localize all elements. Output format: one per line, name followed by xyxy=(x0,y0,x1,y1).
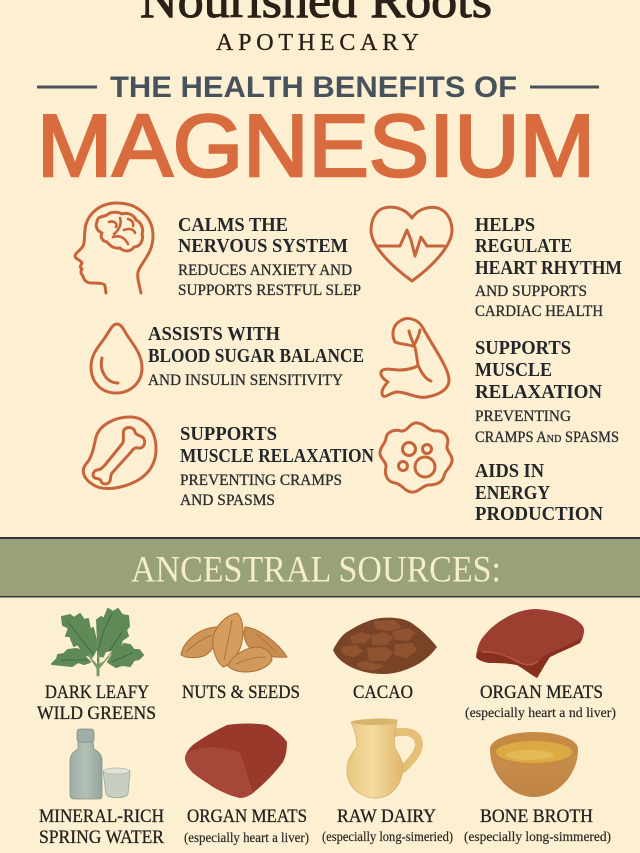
text: helps regulate heart rhythm: AND SUPPORTS xyxy=(475,283,587,300)
icon: bottle and cup xyxy=(70,729,130,799)
brand subtitle: APOTHECARY xyxy=(216,30,419,56)
text: calms the nervous system: SUPPORTS RESTFUL SLEP xyxy=(178,282,361,299)
label: dark leafy wild greens: DARK LEAFY xyxy=(45,682,149,703)
text: supports muscle relaxation right: MUSCLE xyxy=(475,359,552,381)
label: raw dairy: (especially long-simeried) xyxy=(322,830,453,845)
title xyxy=(37,71,599,195)
icon: cell with mitochondria xyxy=(380,423,452,492)
label: bone broth: BONE BROTH xyxy=(480,806,593,827)
benefit: muscle relaxation left xyxy=(83,417,374,509)
section banner: ancestral sources xyxy=(0,537,640,598)
text: aids in energy production xyxy=(475,460,604,525)
icon: blood drop xyxy=(91,324,142,393)
label: raw dairy xyxy=(322,806,453,845)
icon: bowl of broth xyxy=(490,732,578,797)
text: helps regulate heart rhythm xyxy=(475,214,622,320)
source: organ meats bottom xyxy=(184,724,309,846)
source: dark leafy wild greens xyxy=(37,609,156,724)
text: aids in energy production: AIDS IN xyxy=(475,460,545,482)
header: brand xyxy=(140,0,492,56)
icon: cacao pod xyxy=(333,618,437,674)
icon: bone in outline xyxy=(83,417,156,489)
label: cacao: CACAO xyxy=(353,682,413,703)
text: calms the nervous system: REDUCES ANXIETY AND xyxy=(178,262,352,279)
label: organ meats top xyxy=(465,682,616,721)
label: raw dairy: RAW DAIRY xyxy=(337,806,436,827)
source: bone broth xyxy=(464,732,611,845)
benefit: energy production xyxy=(380,423,604,525)
text: supports muscle relaxation: MUSCLE RELAXATION xyxy=(180,445,374,467)
text: supports muscle relaxation xyxy=(180,423,374,509)
benefit: muscle relaxation right xyxy=(381,319,619,446)
label: organ meats top: (especially heart a nd liver) xyxy=(465,706,616,721)
text: supports muscle relaxation: PREVENTING CRAMPS xyxy=(180,472,342,489)
text: assists with blood sugar balance xyxy=(148,323,364,389)
text: calms the nervous system: CALMS THE xyxy=(178,214,288,236)
icon: parsley leaf xyxy=(52,609,143,675)
benefit: heart rhythm xyxy=(371,207,622,320)
source: cacao xyxy=(333,618,437,703)
label: organ meats top: ORGAN MEATS xyxy=(480,682,603,703)
text: aids in energy production: PRODUCTION xyxy=(475,503,604,525)
title rule left xyxy=(37,86,97,88)
icon: flexed arm xyxy=(381,319,449,397)
label: nuts and seeds: NUTS & SEEDS xyxy=(182,682,300,703)
label: dark leafy wild greens: WILD GREENS xyxy=(37,703,156,724)
text: supports muscle relaxation right: RELAXATION xyxy=(475,381,603,403)
label: mineral-rich spring water xyxy=(39,806,164,848)
icon: head with brain xyxy=(75,203,153,293)
text: supports muscle relaxation right: CRAMPS AND SPASMS xyxy=(475,429,619,446)
label: bone broth xyxy=(464,806,611,845)
banner heading: ANCESTRAL SOURCES: xyxy=(131,550,501,590)
text: supports muscle relaxation right: PREVENTING xyxy=(475,408,571,425)
label: organ meats bottom: (especially heart a liver) xyxy=(184,831,309,846)
source: nuts and seeds xyxy=(181,613,300,703)
label: organ meats bottom xyxy=(184,806,309,846)
title line two: MAGNESIUM xyxy=(37,96,595,195)
label: dark leafy wild greens xyxy=(37,682,156,724)
label: bone broth: (especially long-simmered) xyxy=(464,830,611,845)
text: calms the nervous system xyxy=(178,214,361,299)
panel: health benefits xyxy=(75,203,622,525)
text: assists with blood sugar balance: AND INSULIN SENSITIVITY xyxy=(148,372,343,389)
benefit: nervous system xyxy=(75,203,361,299)
text: supports muscle relaxation right: SUPPORTS xyxy=(475,337,571,359)
text: supports muscle relaxation: AND SPASMS xyxy=(180,492,275,509)
text: assists with blood sugar balance: BLOOD SUGAR BALANCE xyxy=(148,345,364,367)
text: assists with blood sugar balance: ASSISTS WITH xyxy=(148,323,280,345)
text: helps regulate heart rhythm: HELPS xyxy=(475,214,535,236)
icon: almonds xyxy=(181,613,287,672)
text: supports muscle relaxation: SUPPORTS xyxy=(180,423,277,445)
source: raw dairy xyxy=(322,719,453,845)
icon: organ meat chunk xyxy=(185,724,287,798)
text: aids in energy production: ENERGY xyxy=(475,482,550,504)
text: helps regulate heart rhythm: CARDIAC HEALTH xyxy=(475,303,603,320)
icon: clay jug xyxy=(347,719,419,798)
label: mineral-rich spring water: SPRING WATER xyxy=(39,827,164,848)
title rule right xyxy=(530,86,599,88)
icon: heart with pulse xyxy=(371,207,452,281)
text: supports muscle relaxation right xyxy=(475,337,619,446)
benefit: blood sugar xyxy=(91,323,364,393)
panel: food sources xyxy=(37,609,616,848)
label: mineral-rich spring water: MINERAL-RICH xyxy=(39,806,164,827)
label: organ meats bottom: ORGAN MEATS xyxy=(187,806,307,827)
source: organ meats top xyxy=(465,609,616,721)
source: mineral-rich spring water xyxy=(39,729,164,848)
icon: organ meat slab xyxy=(476,609,584,678)
text: calms the nervous system: NERVOUS SYSTEM xyxy=(178,235,348,257)
title line one: THE HEALTH BENEFITS OF xyxy=(110,71,517,104)
text: helps regulate heart rhythm: HEART RHYTHM xyxy=(475,257,622,279)
text: helps regulate heart rhythm: REGULATE xyxy=(475,235,572,257)
